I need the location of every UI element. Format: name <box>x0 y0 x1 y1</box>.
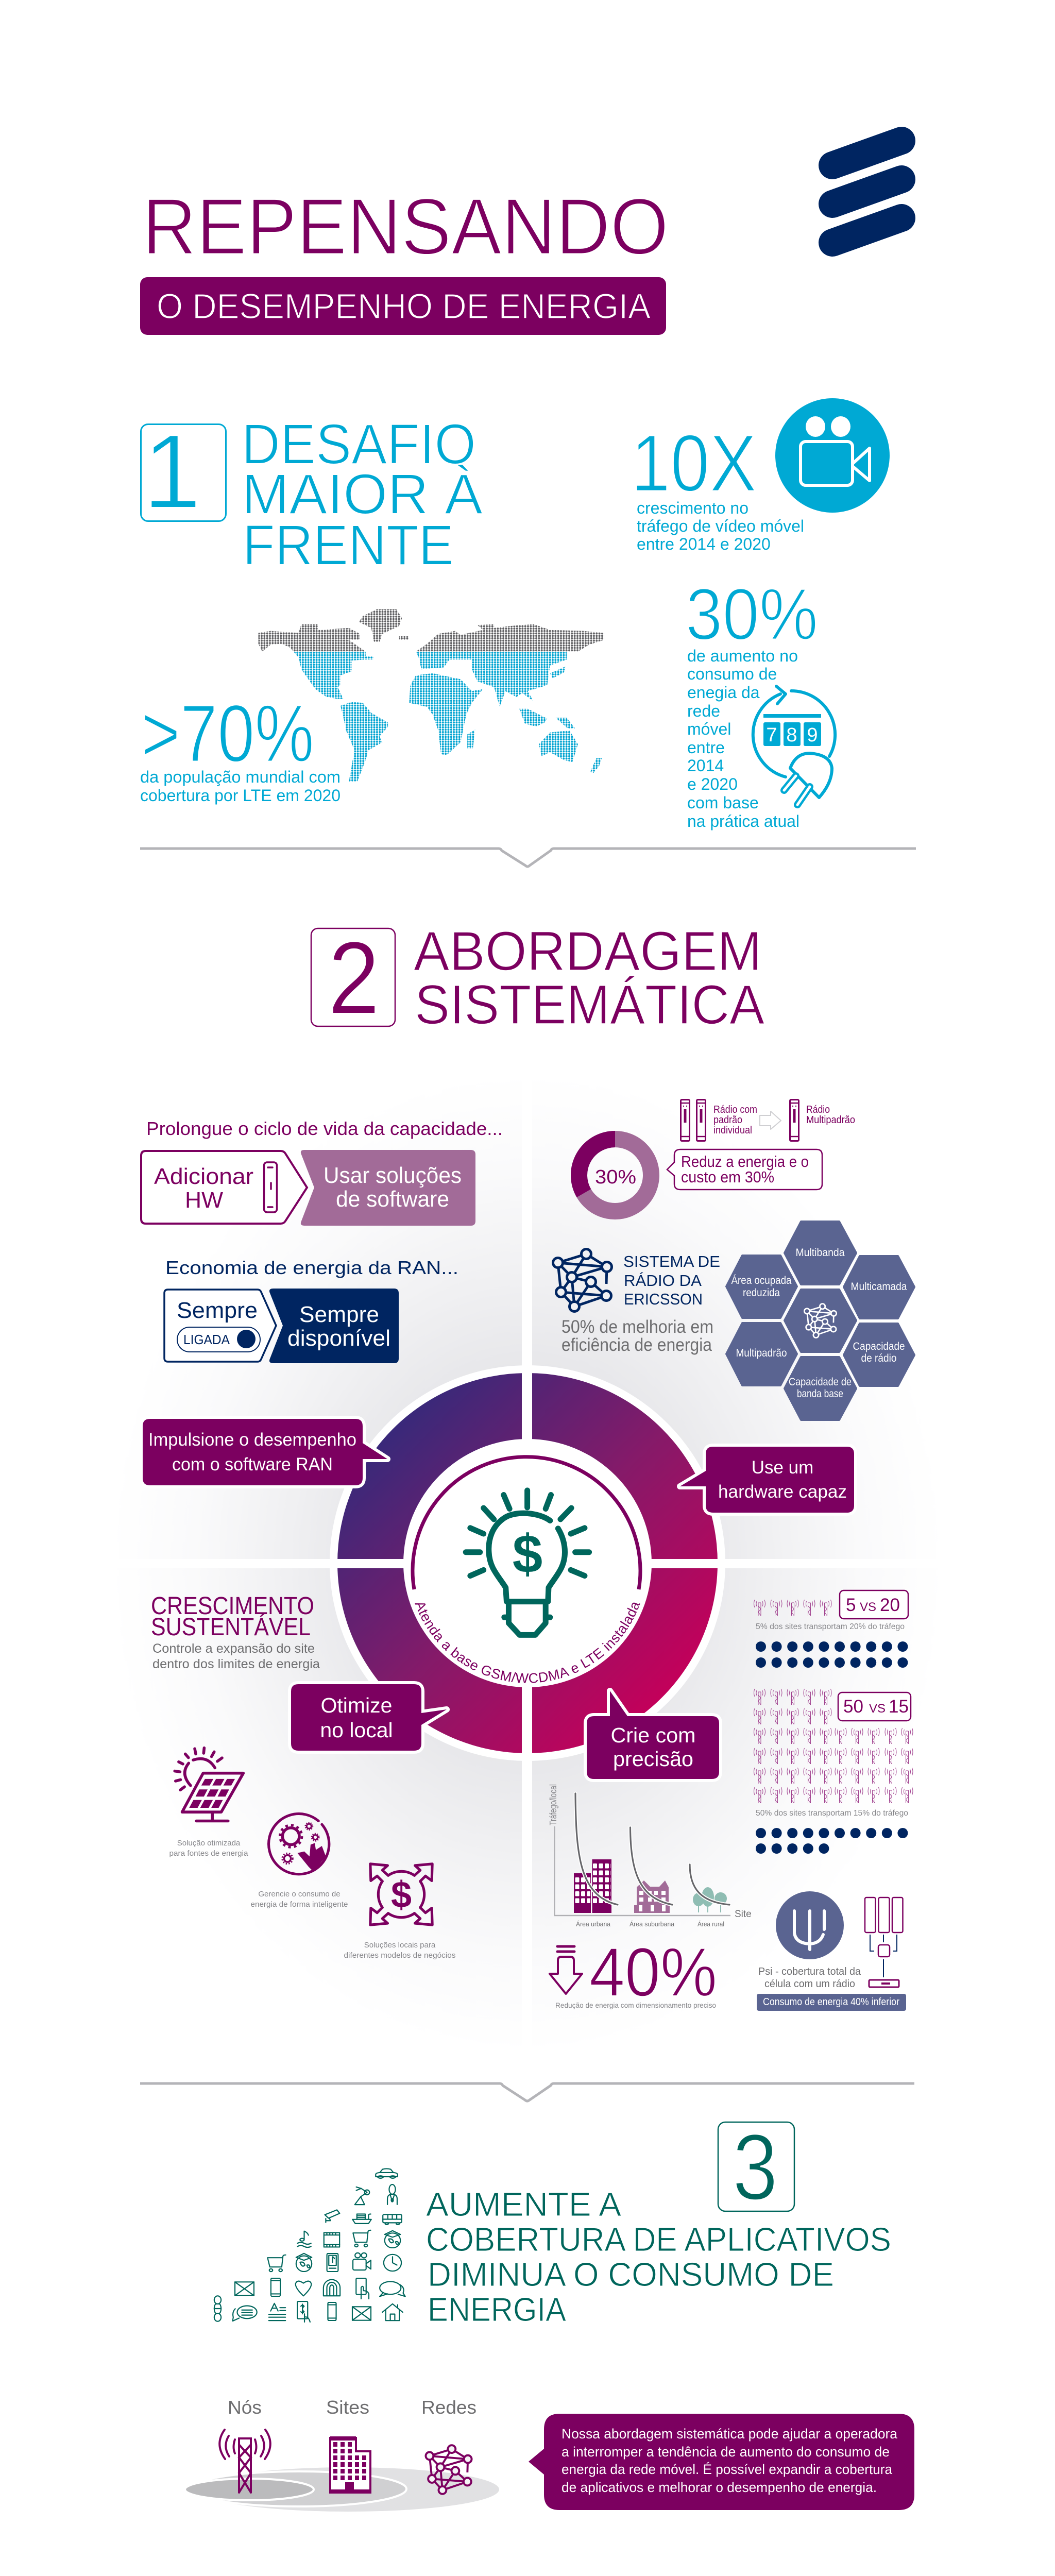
text: Rádio Multipadrão: Multipadrão <box>806 1114 855 1126</box>
callout: conclusion: de aplicativos e melhorar o desempenho de energia. <box>561 2480 877 2495</box>
caption: 50% dos sites: 50% dos sites transportam 15% do tráfego <box>756 1809 908 1818</box>
hexagon labels: Multipadrão <box>736 1347 787 1359</box>
icon: suburban building <box>634 1880 670 1913</box>
bubble: Impulsione: com o software RAN <box>172 1454 333 1475</box>
curves: traffic decay <box>575 1793 729 1905</box>
bubble: Otimize no local <box>291 1684 447 1751</box>
labels: area types <box>576 1920 724 1928</box>
icon: energy meter with plug <box>753 686 835 805</box>
hexagon labels <box>731 1247 907 1400</box>
caption: 5% dos sites: 5% dos sites transportam 20% do tráfego <box>756 1622 905 1631</box>
caption: redução de energia: Redução de energia com dimensionamento preciso <box>555 2001 716 2009</box>
section 3 heading: AUMENTE A <box>426 2185 622 2223</box>
icon: video camera in circle <box>775 398 890 513</box>
stat: 10X video traffic: 10X <box>631 418 757 509</box>
text: Rádio com padrão individual <box>713 1104 757 1136</box>
badge: 5 vs 20: 20 <box>880 1595 900 1615</box>
bubble: Impulsione: Impulsione o desempenho <box>148 1430 356 1450</box>
text: video traffic growth: tráfego de vídeo móvel <box>637 517 804 535</box>
bubble: Crie com precisão: precisão <box>613 1747 693 1771</box>
arrow box: Sempre ligada: Sempre <box>177 1298 258 1323</box>
arrow box: Adicionar HW: Adicionar <box>154 1164 253 1189</box>
heading: Sistema de rádio da Ericsson <box>623 1252 720 1308</box>
logo: Ericsson <box>832 141 901 243</box>
text: Rádio com padrão individual: padrão <box>713 1114 742 1126</box>
arrow box: Usar soluções de software: de software <box>336 1187 449 1212</box>
banner: consumo de energia 40% inferior <box>757 1994 906 2011</box>
bubble: Impulsione <box>143 1419 387 1485</box>
text: Rádio com padrão individual: individual <box>713 1125 752 1136</box>
hexagon labels: Capacidade <box>853 1341 905 1352</box>
section 3 heading: DIMINUA O CONSUMO DE <box>428 2256 834 2293</box>
section 3 heading <box>426 2185 891 2328</box>
labels: nós, sites, redes <box>228 2397 477 2418</box>
donut chart: 30% <box>579 1139 651 1211</box>
arrow box: Usar soluções de software: Usar soluções <box>324 1163 462 1188</box>
icons: individual standard radios <box>681 1099 706 1141</box>
arrow box: Sempre disponível <box>269 1289 399 1363</box>
icon group: 5 towers <box>754 1600 831 1616</box>
text: video traffic growth: crescimento no <box>637 499 748 517</box>
bubble: Otimize no local: Otimize <box>321 1693 392 1717</box>
labels: nós, sites, redes: Sites <box>326 2397 369 2418</box>
labels: nós, sites, redes: Redes <box>421 2397 477 2418</box>
icon: down arrow <box>550 1946 582 1994</box>
bubble: Use um hardware capaz: hardware capaz <box>718 1482 847 1502</box>
text: Rádio com padrão individual: Rádio com <box>713 1104 757 1115</box>
chart: traffic per site by area: Tráfego/local <box>548 1784 558 1825</box>
text: energy increase description: 2014 <box>687 756 724 775</box>
text: energy increase description <box>687 647 799 831</box>
labels: area types: Área urbana <box>576 1920 611 1928</box>
section 1 heading: Desafio maior à frente: MAIOR À <box>242 463 483 526</box>
hexagon labels: Multibanda <box>795 1247 845 1259</box>
text: energy increase description: de aumento no <box>687 647 798 665</box>
stat: 30% energy increase <box>686 573 818 831</box>
stat: 30% energy increase: 30% <box>686 573 818 655</box>
text: 50% de melhoria <box>561 1317 713 1355</box>
subtitle banner: O desempenho de energia <box>140 277 666 335</box>
text: LTE coverage description: cobertura por LTE em 2020 <box>140 786 341 805</box>
hexagon labels: Capacidade de <box>789 1376 852 1388</box>
icon: small network <box>804 1303 837 1338</box>
bubble: Use um hardware capaz: Use um <box>752 1458 813 1478</box>
badge: 50 vs 15 <box>838 1692 911 1721</box>
icon: radio system network <box>553 1249 612 1312</box>
text: energy increase description: entre <box>687 738 725 757</box>
text: energy increase description: enegia da <box>687 683 760 702</box>
arrow box: Sempre ligada <box>164 1290 276 1362</box>
text: energy increase description: com base <box>687 793 759 812</box>
caption: soluções locais <box>344 1941 455 1960</box>
labels: nós, sites, redes: Nós <box>228 2397 262 2418</box>
text: 50% de melhoria: eficiência de energia <box>561 1335 712 1355</box>
labels: area types: Área suburbana <box>629 1920 675 1928</box>
icon: solar panel <box>175 1748 243 1821</box>
icon: building <box>330 2438 370 2493</box>
chart: traffic per site by area <box>548 1784 752 1928</box>
callout: reduz a energia: custo em 30% <box>681 1168 774 1186</box>
text: energy increase description: e 2020 <box>687 775 738 793</box>
callout: reduz a energia <box>667 1149 822 1190</box>
bubble: Crie com precisão <box>587 1691 719 1779</box>
heading: Crescimento sustentável: CRESCIMENTO <box>151 1592 314 1620</box>
icon: tower <box>219 2430 270 2493</box>
arrow box: Usar soluções de software <box>301 1150 475 1226</box>
labels: area types: Área rural <box>697 1920 724 1928</box>
text: Psi caption: Psi - cobertura total da <box>758 1966 861 1977</box>
caption: solução otimizada: para fontes de energia <box>169 1849 248 1858</box>
stat: 10X video traffic <box>631 418 804 553</box>
section 3 number box: 3 <box>733 2114 778 2219</box>
stat: 70% LTE coverage: >70% <box>141 688 314 779</box>
caption: gerencie o consumo <box>250 1890 348 1909</box>
section 1 number box: 1 <box>143 412 201 531</box>
heading: Crescimento sustentável <box>151 1592 314 1641</box>
text: energy increase description: rede <box>687 702 720 720</box>
chart: traffic per site by area: Site <box>735 1909 752 1920</box>
arrow box: Adicionar HW <box>141 1151 307 1224</box>
text: Rádio Multipadrão: Rádio <box>806 1104 830 1115</box>
text: Economia de energia da RAN: Economia de energia da RAN... <box>165 1257 458 1278</box>
divider 1 <box>140 849 916 867</box>
section 2 heading: Abordagem sistemática <box>414 920 764 1036</box>
arrow: to multistandard radio <box>760 1111 781 1129</box>
caption: soluções locais: Soluções locais para <box>364 1941 436 1950</box>
arrow box: Sempre disponível: Sempre <box>299 1302 379 1327</box>
diagram: three radios to one <box>865 1897 903 1987</box>
section 3 number box <box>718 2114 794 2219</box>
icon: energy meter with plug: 8 <box>786 724 797 746</box>
section 1 heading: Desafio maior à frente <box>242 413 483 577</box>
dots: 15 traffic <box>756 1828 908 1854</box>
donut chart: 30%: 30% <box>595 1166 636 1188</box>
section 3 heading: ENERGIA <box>428 2291 567 2328</box>
icon: Psi circle <box>776 1891 844 1959</box>
hexagon labels: reduzida <box>743 1287 780 1299</box>
icon: light bulb with dollar <box>466 1490 589 1635</box>
wheel: central diagram <box>330 1365 725 1761</box>
hexagon cluster <box>726 1222 914 1420</box>
caption: soluções locais: diferentes modelos de negócios <box>344 1951 455 1960</box>
text: dollar sign: $ <box>391 1874 412 1916</box>
icon group: 50 towers <box>754 1689 913 1803</box>
text: 50% de melhoria: 50% de melhoria em <box>561 1317 713 1337</box>
text: LTE coverage description <box>140 768 341 805</box>
icon: gears and wrench <box>269 1814 329 1874</box>
text: Psi caption <box>758 1966 861 1990</box>
icon: rural trees <box>693 1887 727 1912</box>
section 2 heading: Abordagem sistemática: SISTEMÁTICA <box>415 973 764 1036</box>
title: Repensando: REPENSANDO <box>142 182 669 271</box>
subtitle banner: O desempenho de energia: O DESEMPENHO DE ENERGIA <box>157 286 651 326</box>
stat: 40%: 40% <box>589 1934 717 2011</box>
arrow box: Sempre disponível: disponível <box>287 1326 390 1351</box>
arrow box: Adicionar HW: HW <box>185 1188 223 1213</box>
text: Controle a expansão: dentro dos limites de energia <box>152 1657 320 1671</box>
section 1 heading: Desafio maior à frente: DESAFIO <box>242 413 476 476</box>
hexagon labels: de rádio <box>861 1352 896 1364</box>
callout: conclusion <box>529 2414 914 2510</box>
heading: Sistema de rádio da Ericsson: SISTEMA DE <box>623 1252 720 1270</box>
icon: energy meter with plug: 7 <box>766 724 777 746</box>
text: Controle a expansão: Controle a expansão do site <box>152 1641 315 1656</box>
world map dots <box>258 603 608 788</box>
badge: 5 vs 20: 5 <box>846 1595 856 1615</box>
banner: consumo de energia 40% inferior: Consumo de energia 40% inferior <box>763 1996 899 2008</box>
hexagon labels: Área ocupada <box>731 1275 792 1286</box>
caption: gerencie o consumo: energia de forma inteligente <box>250 1900 348 1909</box>
callout: conclusion: a interromper a tendência de aumento do consumo de <box>561 2444 890 2460</box>
dots: 20 traffic <box>756 1641 908 1668</box>
icon pyramid: applications <box>214 2168 405 2322</box>
section 2 number box <box>311 921 395 1036</box>
icon: network <box>426 2445 472 2494</box>
section 1 heading: Desafio maior à frente: FRENTE <box>243 514 454 577</box>
text: energy increase description: móvel <box>687 720 731 738</box>
section 3 heading: COBERTURA DE APLICATIVOS <box>426 2221 891 2258</box>
badge: 50 vs 15: 15 <box>889 1697 909 1717</box>
text: video traffic growth <box>637 499 804 553</box>
section 2 number box: 2 <box>328 921 380 1036</box>
background: quadrant gradient <box>31 1046 1025 2076</box>
text: video traffic growth: entre 2014 e 2020 <box>637 535 771 553</box>
heading: Sistema de rádio da Ericsson: RÁDIO DA <box>624 1272 702 1290</box>
hexagon labels: Multicamada <box>851 1281 907 1293</box>
callout: reduz a energia: Reduz a energia e o <box>681 1153 809 1171</box>
bubble: Crie com precisão: Crie com <box>611 1723 695 1747</box>
text: energy increase description: consumo de <box>687 665 777 683</box>
toggle: ligada <box>177 1327 260 1352</box>
icon: multistandard radio <box>790 1099 798 1141</box>
caption: solução otimizada: Solução otimizada <box>177 1839 241 1848</box>
icon: urban buildings <box>574 1859 611 1913</box>
icon: dollar with outward arrows <box>370 1864 432 1925</box>
callout: conclusion: Nossa abordagem sistemática pode ajudar a operadora <box>561 2426 898 2442</box>
badge: 5 vs 20: VS <box>860 1600 876 1614</box>
hexagon labels: banda base <box>797 1388 843 1400</box>
icon: hardware unit <box>264 1162 277 1212</box>
heading: Crescimento sustentável: SUSTENTÁVEL <box>151 1614 311 1641</box>
caption: solução otimizada <box>169 1839 248 1858</box>
caption: gerencie o consumo: Gerencie o consumo de <box>258 1890 341 1899</box>
text: Psi caption: célula com um rádio <box>764 1978 855 1990</box>
text: LTE coverage description: da população mundial com <box>140 768 341 786</box>
callout: conclusion: energia da rede móvel. É possível expandir a cobertura <box>561 2462 893 2477</box>
text: Prolongue o ciclo de vida: Prolongue o ciclo de vida da capacidade... <box>146 1118 503 1139</box>
text: Rádio Multipadrão <box>806 1104 855 1126</box>
section 2 heading: Abordagem sistemática: ABORDAGEM <box>414 920 762 982</box>
wheel: central diagram: $ <box>513 1524 542 1584</box>
bubble: Use um hardware capaz <box>680 1447 854 1513</box>
text: Controle a expansão <box>152 1641 320 1671</box>
divider 2 <box>140 2083 914 2101</box>
heading: Sistema de rádio da Ericsson: ERICSSON <box>624 1290 703 1308</box>
bubble: Otimize no local: no local <box>320 1718 393 1742</box>
badge: 5 vs 20 <box>840 1590 908 1619</box>
icon: energy meter with plug: 9 <box>807 724 818 746</box>
text: energy increase description: na prática atual <box>687 812 799 831</box>
curved text: Atenda a base: Atenda a base GSM/WCDMA e LTE instalada <box>415 1602 640 1683</box>
toggle: ligada: LIGADA <box>183 1332 230 1347</box>
section 1 number box <box>141 412 226 531</box>
diagram: nested ellipses <box>185 2467 499 2512</box>
badge: 50 vs 15: 50 <box>843 1697 863 1717</box>
badge: 50 vs 15: VS <box>869 1702 886 1716</box>
